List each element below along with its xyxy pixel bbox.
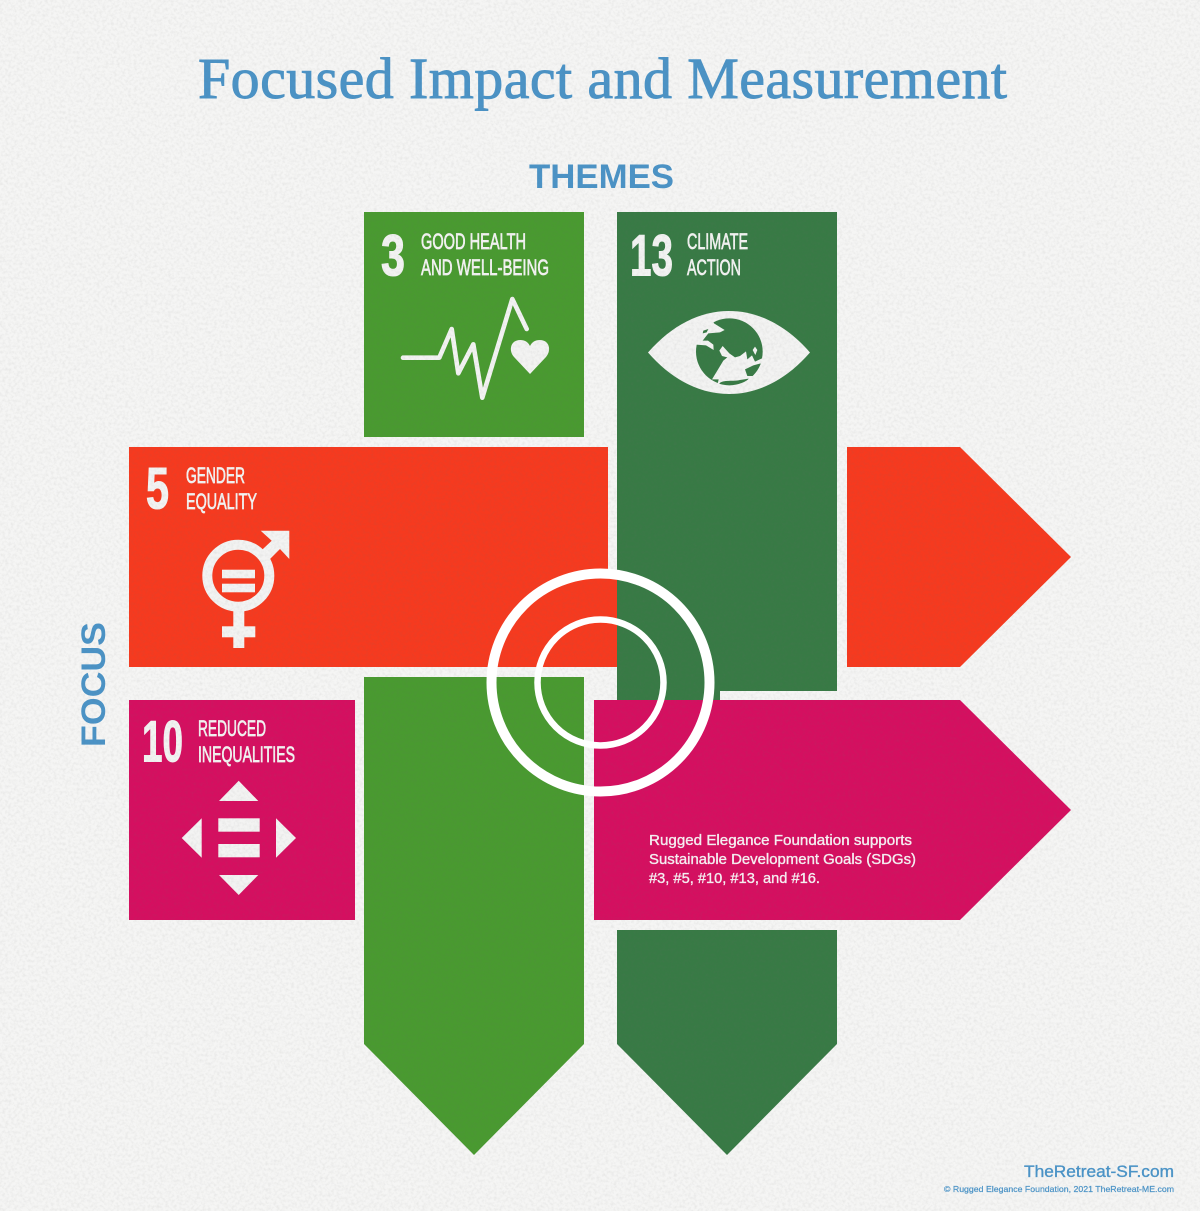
label: reduced inequalities: INEQUALITIES bbox=[198, 742, 295, 767]
text block: SDG statement: #3, #5, #10, #13, and #16. bbox=[649, 871, 820, 887]
text block: SDG statement: Rugged Elegance Foundation supports bbox=[649, 833, 912, 849]
target rings bbox=[492, 574, 710, 792]
number 3: 3 bbox=[381, 224, 405, 288]
panel: SDG 13 climate action bbox=[617, 212, 837, 1155]
panel: SDG 5 gender equality bbox=[129, 447, 1071, 667]
heading: focus: FOCUS bbox=[75, 622, 113, 747]
label: climate action: CLIMATE bbox=[687, 229, 748, 254]
green downward arrow bbox=[364, 677, 584, 1155]
heading: themes: THEMES bbox=[529, 158, 674, 196]
label: good health and well-being: GOOD HEALTH bbox=[421, 229, 526, 254]
magenta tile bbox=[129, 700, 355, 920]
dark green column bbox=[617, 212, 837, 700]
label: reduced inequalities bbox=[198, 716, 295, 767]
number 5: 5 bbox=[146, 456, 169, 522]
label: gender equality: GENDER bbox=[186, 463, 245, 488]
icon: eye with globe bbox=[648, 311, 810, 394]
number 10: 10 bbox=[142, 710, 183, 774]
label: good health and well-being: AND WELL-BEING bbox=[421, 255, 549, 280]
icon: heartbeat and heart bbox=[403, 299, 549, 398]
green tile bbox=[364, 212, 584, 437]
panel: SDG 10 reduced inequalities bbox=[129, 700, 1071, 920]
icon: arrows around equals bbox=[182, 781, 296, 895]
footer: copyright: © Rugged Elegance Foundation, 2021 TheRetreat-ME.com bbox=[944, 1184, 1174, 1194]
label: gender equality bbox=[186, 463, 257, 514]
icon: gender symbol bbox=[207, 531, 289, 648]
dark green downward arrow bbox=[617, 930, 837, 1155]
label: climate action bbox=[687, 229, 748, 280]
footer: website: TheRetreat-SF.com bbox=[1024, 1162, 1174, 1181]
panel: SDG 3 good health bbox=[364, 212, 584, 1155]
number 13: 13 bbox=[630, 224, 673, 288]
label: climate action: ACTION bbox=[687, 255, 741, 280]
label: good health and well-being bbox=[421, 229, 549, 280]
text block: SDG statement: Sustainable Development Goals (SDGs) bbox=[649, 852, 916, 868]
red band bbox=[129, 447, 617, 667]
text block: SDG statement bbox=[649, 833, 916, 887]
red arrowhead bbox=[847, 447, 1071, 667]
magenta arrow bbox=[594, 700, 1071, 920]
label: reduced inequalities: REDUCED bbox=[198, 716, 266, 741]
title: Focused Impact and Measurement bbox=[198, 46, 1007, 111]
label: gender equality: EQUALITY bbox=[186, 489, 257, 514]
